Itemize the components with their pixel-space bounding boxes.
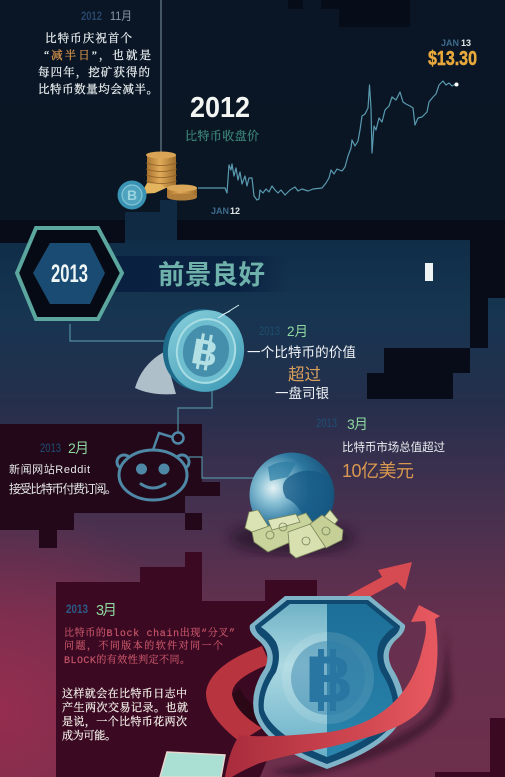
price line chart [198, 81, 458, 200]
red arrow: back branch [206, 562, 412, 742]
pixel block: fork dark panel [56, 552, 505, 777]
icon: coin stacks [141, 152, 197, 200]
reddit text: 接受比特币付费订阅。 [9, 481, 117, 496]
fork red text: BLOCK的有效性判定不同。 [64, 653, 190, 667]
market cap date: 2013 [316, 418, 337, 430]
silver text [247, 345, 356, 401]
icon: large bitcoin coin [155, 302, 252, 399]
heading: 2012: 2012 [190, 92, 250, 124]
ribbon shadow [270, 625, 452, 777]
fork date: 2013 [66, 604, 88, 616]
hexagon badge: 2013 [17, 228, 122, 319]
subheading: closing price: 比特币收盘价 [185, 128, 259, 143]
silver text: 一个比特币的价值 [247, 345, 356, 360]
shield [250, 596, 405, 769]
pixel blocks: top dark [288, 0, 410, 27]
fork red text: 问题，不同版本的软件对同一个 [64, 639, 223, 653]
pixel block: reddit dark panel [0, 424, 220, 548]
icon: globe [250, 452, 334, 538]
chart start label [211, 206, 240, 216]
silver text: 一盘司银 [275, 385, 330, 401]
icon: reddit alien [117, 432, 189, 500]
fork white text: 是说，一个比特币花两次 [62, 714, 187, 728]
white tick [425, 263, 433, 281]
fork red text [64, 626, 235, 667]
silver text: 超过 [288, 365, 321, 384]
chart start label: 12 [230, 206, 240, 216]
connector: halving line [160, 0, 162, 153]
icon: small bitcoin coin [118, 180, 146, 210]
fork white text: 产生两次交易记录。也就 [62, 700, 188, 714]
reddit date: 2月 [68, 440, 89, 456]
halving text: “减半日”，也就是 [44, 48, 152, 62]
reddit text [9, 462, 117, 496]
chart start label: JAN [211, 206, 229, 216]
fork date: 3月 [96, 603, 117, 619]
icon: large bitcoin coin: B [188, 330, 221, 375]
2012 November date: 11月 [110, 9, 132, 23]
silver date: 2013 [259, 326, 280, 338]
halving text: 比特币数量均会减半。 [38, 82, 158, 96]
2012 November date [81, 9, 132, 23]
title band [115, 256, 290, 292]
icon: silver wedge [135, 352, 176, 394]
shield: B [305, 642, 353, 716]
section title: 前景良好 [158, 260, 265, 290]
halving text [38, 31, 158, 96]
fork white text: 这样就会在比特币日志中 [62, 686, 187, 700]
chart end label: JAN [441, 38, 459, 48]
globe shadow [230, 522, 354, 554]
fork date [66, 603, 117, 619]
fork white text: 成为可能。 [62, 728, 116, 742]
silver date [259, 324, 308, 339]
market cap date: 3月 [347, 416, 368, 432]
chart end label [441, 38, 471, 48]
chart end label: 13 [461, 38, 471, 48]
icon: money pile [245, 510, 343, 558]
connector: reddit to globe [189, 457, 258, 478]
halving text: 比特币庆祝首个 [45, 31, 132, 45]
reddit date [40, 440, 89, 456]
2012 November date: 2012 [81, 9, 102, 23]
pixel blocks: lower 2012 blue [125, 200, 177, 240]
icon: paper corner [160, 752, 225, 777]
pixel blocks: 2013 section dark [0, 220, 505, 399]
market cap text: 比特币市场总值超过 [342, 440, 446, 454]
connector: hexagon to coin [70, 324, 172, 341]
left red glow [0, 500, 220, 777]
red arrow: main sweep [225, 605, 440, 777]
icon: small bitcoin coin: B [127, 187, 137, 203]
fork red text: 比特币的Block chain出现“分叉” [64, 626, 235, 640]
reddit date: 2013 [40, 443, 61, 455]
end price: $13.30 [428, 48, 477, 70]
market cap date [316, 416, 368, 432]
hexagon badge: 2013: 2013 [51, 260, 88, 288]
reddit text: 新闻网站Reddit [9, 462, 90, 476]
fork white text [62, 686, 188, 742]
connector: coin to reddit [178, 388, 212, 432]
market cap value: 10亿美元 [342, 461, 414, 481]
silver date: 2月 [287, 324, 308, 339]
halving text: 每四年，挖矿获得的 [38, 65, 150, 79]
